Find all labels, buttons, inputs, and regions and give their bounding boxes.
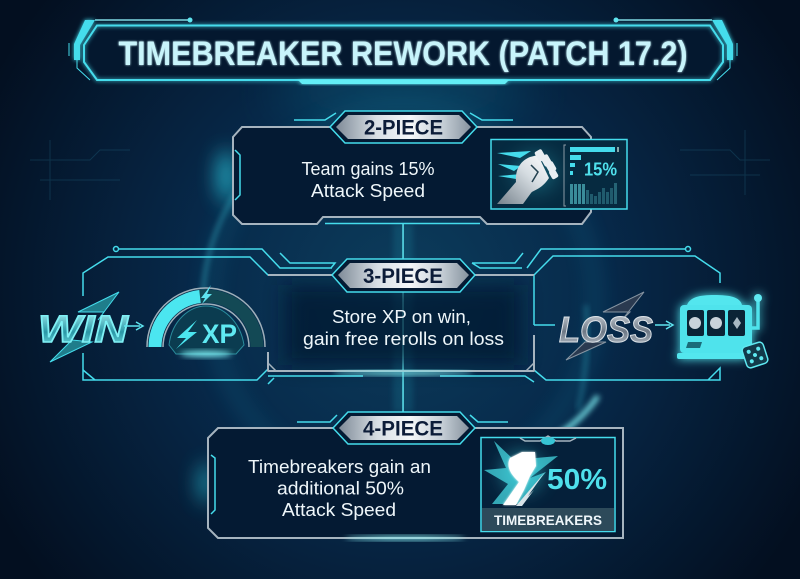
icon: fist 15% attack speed (491, 140, 627, 209)
icon: loss logo (559, 292, 653, 360)
text: 4-piece effect: additional 50% (277, 478, 404, 498)
badge: 3-piece (332, 259, 475, 292)
frame: right side (440, 246, 720, 382)
icon: xp gauge: XP (202, 319, 237, 349)
panel: 4-piece (208, 412, 623, 540)
icon: timebreakers 50% card: 50% (547, 464, 607, 496)
badge: 3-piece: 3-PIECE (363, 265, 443, 288)
icon: xp gauge (147, 285, 265, 357)
text: 4-piece effect: Timebreakers gain an (248, 457, 431, 477)
icon: win logo (38, 292, 130, 362)
badge: 2-piece (330, 111, 477, 143)
arrow: loss to slot machine (655, 321, 673, 329)
text: 3-piece effect: Store XP on win, (332, 307, 471, 327)
badge: 4-piece (333, 412, 475, 444)
connectors (393, 224, 413, 412)
badge: 4-piece: 4-PIECE (363, 418, 443, 440)
icon: win logo: WIN (38, 309, 130, 351)
frame: silver rails (268, 275, 534, 371)
icon: loss logo: LOSS (559, 309, 653, 350)
title banner (69, 18, 737, 84)
text: 2-piece effect: Attack Speed (311, 181, 425, 201)
text: 2-piece effect: Team gains 15% (302, 159, 434, 179)
text: 2-piece effect (302, 159, 434, 201)
text: 4-piece effect (248, 457, 431, 520)
icon: timebreakers 50% card: TIMEBREAKERS (494, 512, 602, 528)
icon: slot machine and dice (677, 294, 769, 369)
arrow: win to xp (124, 322, 143, 330)
text: 3-piece effect (303, 307, 504, 349)
title text: TIMEBREAKER REWORK (PATCH 17.2) (118, 35, 688, 73)
panel: 3-piece (38, 246, 769, 384)
frame: left side (83, 246, 363, 384)
panel: 2-piece (233, 111, 627, 224)
text: 4-piece effect: Attack Speed (282, 500, 396, 520)
text: 3-piece effect: gain free rerolls on loss (303, 329, 504, 349)
icon: timebreakers 50% card (481, 436, 615, 532)
icon: fist 15% attack speed: 15% (584, 160, 617, 180)
badge: 2-piece: 2-PIECE (364, 116, 443, 140)
